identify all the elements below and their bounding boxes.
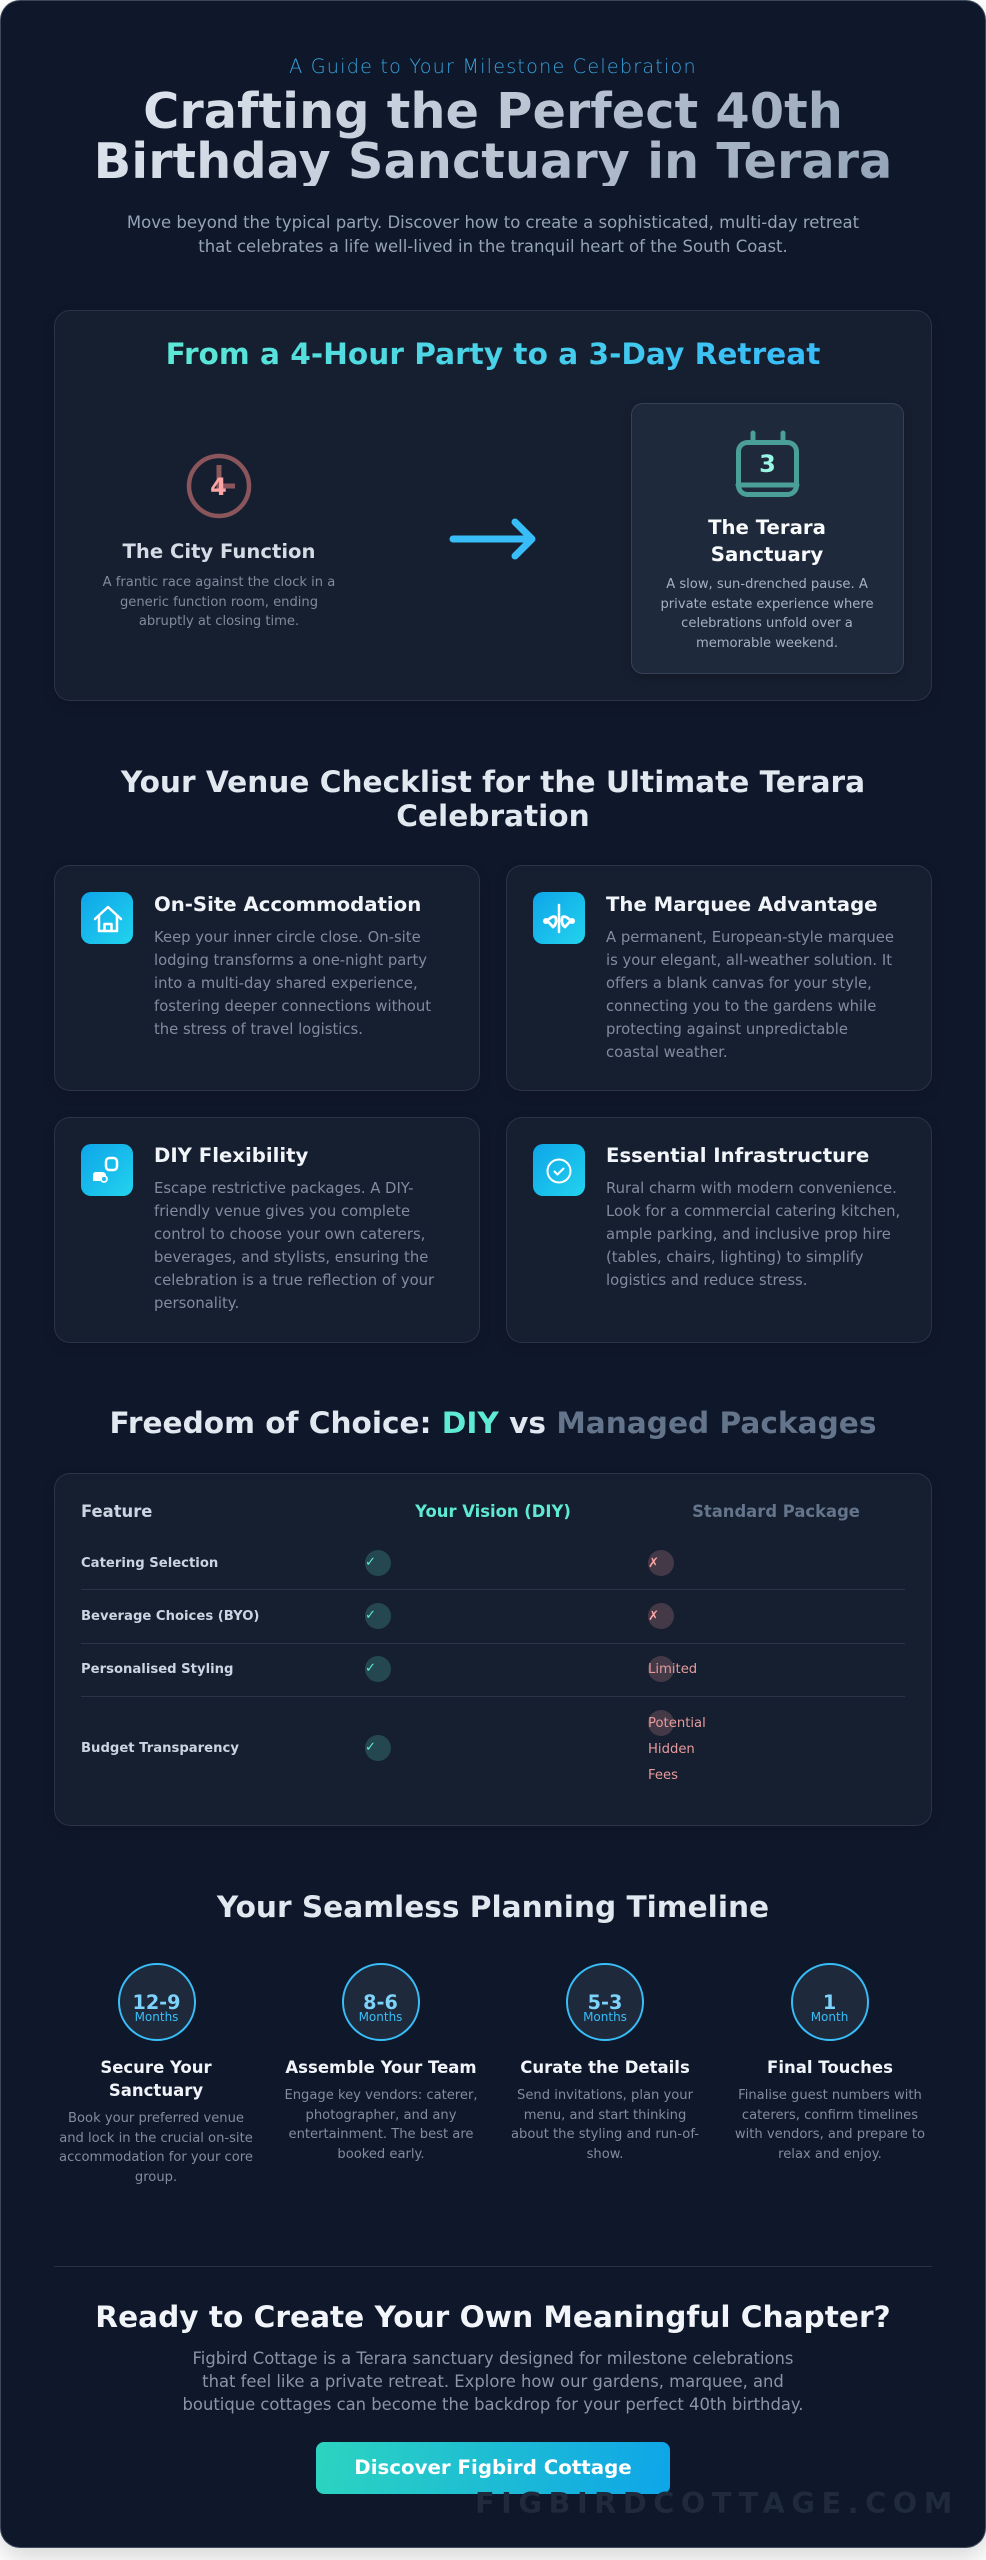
- description: A permanent, European-style marquee: [606, 929, 894, 946]
- step text: entertainment. The best are: [288, 2127, 473, 2142]
- heading: The Marquee Advantage: [606, 893, 878, 916]
- step heading: Secure Your: [100, 2058, 212, 2077]
- badge: [118, 1963, 196, 2041]
- card: on-site accommodation: [54, 865, 480, 1091]
- row: catering selection: Catering Selection: [81, 1556, 218, 1571]
- row: budget transparency: Hidden: [648, 1742, 695, 1757]
- table header: Feature: [81, 1502, 152, 1521]
- description: [606, 1180, 900, 1289]
- step heading: [100, 2058, 212, 2100]
- icon: three day calendar: 3: [759, 450, 776, 478]
- heading: DIY Flexibility: [154, 1144, 308, 1167]
- section heading: venue checklist: [120, 765, 865, 832]
- step text: menu, and start thinking: [524, 2108, 686, 2123]
- icon: three day calendar: [736, 430, 800, 497]
- description: offers a blank canvas for your style,: [606, 975, 872, 992]
- sanctuary heading: Sanctuary: [711, 542, 823, 566]
- step heading: Curate the Details: [520, 2058, 690, 2077]
- step text: booked early.: [337, 2147, 425, 2162]
- description: Rural charm with modern convenience.: [606, 1180, 897, 1197]
- city function text: abruptly at closing time.: [139, 614, 299, 629]
- city function text: generic function room, ending: [120, 595, 318, 610]
- city function heading: The City Function: [123, 540, 315, 563]
- step text: Book your preferred venue: [68, 2111, 244, 2126]
- table header: Standard Package: [692, 1502, 860, 1521]
- title: Birthday Sanctuary in Terara: [94, 132, 892, 190]
- step text: relax and enjoy.: [778, 2147, 882, 2162]
- step text: [735, 2088, 925, 2162]
- row: budget transparency: Budget Transparency: [81, 1741, 239, 1756]
- timeline step: 1 month: [735, 1963, 925, 2162]
- description: [154, 1180, 434, 1312]
- row: catering selection: ✗: [648, 1556, 659, 1571]
- row: beverage choices: Beverage Choices (BYO): [81, 1609, 259, 1624]
- row: budget transparency: ✓: [365, 1740, 376, 1755]
- description: control to choose your own caterers,: [154, 1226, 425, 1243]
- heading: On-Site Accommodation: [154, 893, 421, 916]
- step heading: Final Touches: [767, 2058, 893, 2077]
- row: budget transparency: Fees: [648, 1768, 678, 1783]
- card: Terara sanctuary: [631, 403, 904, 674]
- timeline step: 8-6 months: [284, 1963, 478, 2162]
- subtitle: Move beyond the typical party. Discover how to create a sophisticated, multi-day retreat: [127, 213, 859, 232]
- sanctuary text: celebrations unfold over a: [681, 616, 853, 631]
- sanctuary text: A slow, sun-drenched pause. A: [666, 577, 868, 592]
- description: the stress of travel logistics.: [154, 1021, 363, 1038]
- description: [154, 929, 431, 1038]
- description: ample parking, and inclusive prop hire: [606, 1226, 891, 1243]
- row: personalised styling: Limited: [648, 1662, 697, 1677]
- call to action text: [183, 2349, 803, 2414]
- call to action button: Discover Figbird Cottage: [354, 2456, 632, 2479]
- sanctuary text: memorable weekend.: [696, 636, 838, 651]
- step heading: Sanctuary: [109, 2081, 203, 2100]
- description: coastal weather.: [606, 1044, 728, 1061]
- step text: Engage key vendors: caterer,: [284, 2088, 478, 2103]
- card: essential infrastructure: [506, 1117, 932, 1343]
- city function text: A frantic race against the clock in a: [103, 575, 335, 590]
- description: Keep your inner circle close. On-site: [154, 929, 421, 946]
- description: (tables, chairs, lighting) to simplify: [606, 1249, 864, 1266]
- row: catering selection: [81, 1550, 674, 1576]
- step text: with vendors, and prepare to: [735, 2127, 925, 2142]
- row: budget transparency: [81, 1710, 706, 1783]
- icon: DIY pieces: [81, 1144, 133, 1196]
- panel: party to retreat comparison: [54, 310, 932, 701]
- step text: [511, 2088, 699, 2162]
- description: beverages, and stylists, ensuring the: [154, 1249, 428, 1266]
- description: into a multi-day shared experience,: [154, 975, 418, 992]
- step text: photographer, and any: [306, 2108, 456, 2123]
- description: friendly venue gives you complete: [154, 1203, 410, 1220]
- badge: [790, 1963, 868, 2041]
- watermark: FIGBIRDCOTTAGE.COM: [475, 2486, 959, 2520]
- description: fostering deeper connections without: [154, 998, 431, 1015]
- badge: Month: [811, 2010, 848, 2024]
- row: budget transparency: Potential: [648, 1716, 706, 1731]
- row: catering selection: ✓: [365, 1555, 376, 1570]
- step text: Send invitations, plan your: [517, 2088, 693, 2103]
- icon: four hour clock: 4: [210, 473, 227, 501]
- row: personalised styling: [81, 1656, 697, 1682]
- call to action text: that feel like a private retreat. Explore how our gardens, marquee, and: [202, 2372, 784, 2391]
- description: protecting against unpredictable: [606, 1021, 848, 1038]
- call to action button: [316, 2442, 670, 2494]
- subtitle: that celebrates a life well-lived in the tranquil heart of the South Coast.: [198, 237, 788, 256]
- description: connecting you to the gardens while: [606, 998, 876, 1015]
- eyebrow: A Guide to Your Milestone Celebration: [289, 55, 697, 78]
- description: celebration is a true reflection of your: [154, 1272, 434, 1289]
- timeline step: 5-3 months: [511, 1963, 699, 2162]
- row: beverage choices: ✓: [365, 1608, 376, 1623]
- badge: 12-9: [132, 1991, 180, 2014]
- sanctuary heading: [708, 516, 826, 566]
- call to action heading: Ready to Create Your Own Meaningful Chapter?: [95, 2300, 891, 2334]
- subtitle: [127, 213, 859, 256]
- table header: [81, 1502, 860, 1521]
- arrow: [450, 518, 536, 560]
- badge: Months: [359, 2010, 402, 2024]
- city function text: [102, 575, 335, 629]
- step text: accommodation for your core: [59, 2150, 253, 2165]
- step text: about the styling and run-of-: [511, 2127, 699, 2142]
- card: DIY flexibility: [54, 1117, 480, 1343]
- icon: house: [81, 892, 133, 944]
- step text: show.: [587, 2147, 623, 2162]
- heading: Essential Infrastructure: [606, 1144, 869, 1167]
- call to action text: Figbird Cottage is a Terara sanctuary designed for milestone celebrations: [193, 2349, 793, 2368]
- icon: check circle: [533, 1144, 585, 1196]
- comparison heading: From a 4-Hour Party to a 3-Day Retreat: [166, 337, 820, 371]
- row: personalised styling: ✓: [365, 1661, 376, 1676]
- sanctuary text: [660, 577, 874, 651]
- step text: group.: [135, 2170, 177, 2185]
- row: beverage choices: ✗: [648, 1609, 659, 1624]
- step text: [59, 2111, 253, 2185]
- description: Escape restrictive packages. A DIY-: [154, 1180, 413, 1197]
- title: Crafting the Perfect 40th: [143, 82, 843, 140]
- section heading: freedom of choice: Freedom of Choice: DIY vs Managed Packages: [110, 1406, 876, 1440]
- badge: [342, 1963, 420, 2041]
- description: lodging transforms a one-night party: [154, 952, 427, 969]
- description: is your elegant, all-weather solution. It: [606, 952, 892, 969]
- description: logistics and reduce stress.: [606, 1272, 807, 1289]
- badge: 8-6: [363, 1991, 398, 2014]
- badge: Months: [583, 2010, 627, 2024]
- sanctuary text: private estate experience where: [660, 597, 874, 612]
- badge: [566, 1963, 644, 2041]
- badge: Months: [135, 2010, 178, 2024]
- step text: Finalise guest numbers with: [738, 2088, 922, 2103]
- badge: 1: [823, 1991, 836, 2014]
- row: personalised styling: Personalised Styling: [81, 1662, 233, 1677]
- call to action text: boutique cottages can become the backdrop for your perfect 40th birthday.: [183, 2395, 803, 2414]
- description: [606, 929, 894, 1061]
- section heading: venue checklist: Your Venue Checklist for the Ultimate Terara: [121, 765, 865, 799]
- icon: four hour clock: [186, 454, 252, 518]
- step text: caterers, confirm timelines: [742, 2108, 918, 2123]
- icon: marquee: [533, 892, 585, 944]
- step text: [284, 2088, 478, 2162]
- panel: comparison table: [54, 1473, 932, 1826]
- title: [93, 87, 893, 186]
- sanctuary heading: The Terara: [708, 516, 826, 539]
- badge: 5-3: [588, 1991, 622, 2014]
- table header: Your Vision (DIY): [415, 1502, 571, 1521]
- section heading: venue checklist: Celebration: [396, 798, 590, 832]
- card: marquee advantage: [506, 865, 932, 1091]
- description: personality.: [154, 1295, 239, 1312]
- step text: and lock in the crucial on-site: [59, 2131, 253, 2146]
- row: beverage choices: [81, 1603, 674, 1629]
- section heading: planning timeline: Your Seamless Planning Timeline: [217, 1890, 769, 1924]
- description: Look for a commercial catering kitchen,: [606, 1203, 900, 1220]
- timeline step: 12-9 months: [59, 1963, 253, 2185]
- step heading: Assemble Your Team: [285, 2058, 477, 2077]
